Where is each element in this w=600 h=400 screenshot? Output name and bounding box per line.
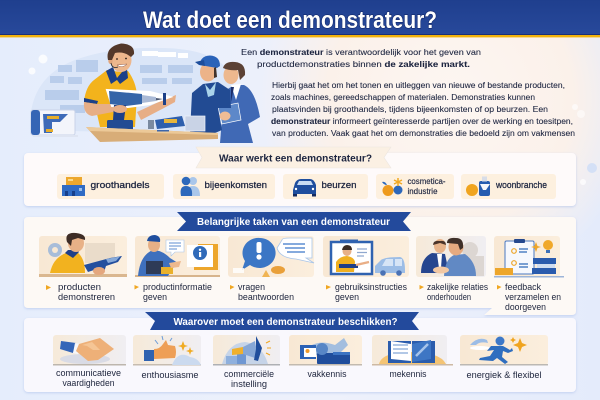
panel: waarover moet een demonstrateur beschikken (24, 312, 576, 392)
person 1: demonstrator in yellow polo (84, 44, 176, 127)
hero illustration: demonstrator showing a drill to two professionals (28, 44, 260, 143)
task labels: feedback (505, 282, 542, 292)
ribbon heading: Belangrijke taken van een demonstrateur (197, 217, 390, 228)
task labels: beantwoorden (238, 292, 294, 302)
chip: bijeenkomsten (173, 174, 275, 199)
ribbon heading: Waar werkt een demonstrateur? (219, 154, 372, 164)
task labels: geven (143, 292, 167, 302)
task labels: vragen (238, 282, 265, 292)
skill labels: mekennis (390, 369, 427, 379)
person 3: suit (218, 62, 260, 143)
task: vragen beantwoorden (228, 236, 314, 277)
skill: mekennis (372, 335, 453, 366)
chip: woonbranche: woonbranche (495, 180, 547, 191)
intro text: van producten. Vaak gaat het om demonstraties die bedoeld zijn om vakmensen (272, 128, 575, 138)
task labels: productinformatie (143, 282, 212, 292)
task: zakelijke relaties onderhouden (416, 236, 486, 277)
intro text: Hierbij gaat het om het tonen en uitleggen van nieuwe of bestande producten, (272, 80, 565, 90)
skill labels: instelling (231, 379, 267, 389)
ribbon heading (145, 312, 419, 330)
task: producten demonstreren (39, 233, 127, 277)
chip: bijeenkomsten: bijeenkomsten (204, 180, 267, 191)
task labels: verzamelen en (505, 292, 561, 302)
skill: vakkennis (289, 335, 362, 366)
chip: woonbranche (461, 174, 556, 199)
chip: groothandels: groothandels (90, 180, 150, 191)
skill labels: commerciële (224, 369, 274, 379)
chip: cosmetica-industrie (376, 174, 454, 199)
case with cordless drill (31, 110, 75, 135)
shelf background (30, 48, 240, 135)
intro text: zoals machines, gereedschappen of materialen. Demonstraties kunnen (271, 92, 535, 102)
chip: cosmetica-industrie: cosmetica- (408, 177, 446, 186)
task labels: demonstreren (58, 292, 115, 302)
intro text (241, 47, 575, 138)
task labels: producten (58, 282, 101, 292)
power drill (107, 90, 170, 132)
chip: beurzen: beurzen (322, 180, 356, 191)
skill labels: vakkennis (308, 369, 347, 379)
title: Wat doet een demonstrateur? (143, 7, 437, 34)
skill labels: energiek & flexibel (466, 370, 542, 380)
skill labels (56, 368, 542, 389)
task: gebruiksinstructies geven (323, 236, 409, 277)
task labels: gebruiksinstructies (335, 282, 408, 292)
task labels: zakelijke relaties (427, 282, 489, 292)
task labels (46, 282, 561, 312)
task labels: doorgeven (505, 302, 546, 312)
task: feedback verzamelen (494, 236, 564, 278)
intro text: Een demonstrateur is verantwoordelijk voor het geven van (241, 47, 481, 57)
task labels: geven (335, 292, 359, 302)
header banner (0, 0, 600, 37)
skill labels: vaardigheden (62, 378, 115, 388)
chip: groothandels (57, 174, 164, 199)
intro text: demonstrateur informeert geïnteresserde partijen over de werking en toesitpen, (271, 116, 573, 126)
skill labels: communicatieve (56, 368, 121, 378)
chip: cosmetica-industrie: industrie (408, 187, 438, 196)
panel: belangrijke taken (24, 212, 576, 315)
skill: communicatieve vaardigheden (53, 335, 126, 366)
intro text: productdemonstraties binnen de zakelijke markt. (257, 59, 470, 69)
task labels: onderhouden (427, 292, 471, 302)
skill: energiek en flexibel (460, 335, 548, 366)
chip: beurzen (283, 174, 368, 199)
task: productinformatie geven (135, 235, 220, 277)
person 2: cap and navy jacket (190, 56, 231, 136)
intro text: plaatsvinden bij groothandels, tijdens bijeenkomsten of op beurzen. Een (272, 104, 548, 114)
ribbon heading (177, 212, 411, 231)
table with products (86, 116, 218, 142)
ribbon heading (196, 147, 391, 168)
skill labels: enthousiasme (142, 370, 199, 380)
skill: enthousiasme (133, 335, 201, 366)
skill: commerciele instelling (213, 335, 280, 366)
ribbon heading: Waarover moet een demonstrateur beschikken? (174, 317, 398, 328)
panel: waar werkt een demonstrateur (24, 147, 576, 206)
